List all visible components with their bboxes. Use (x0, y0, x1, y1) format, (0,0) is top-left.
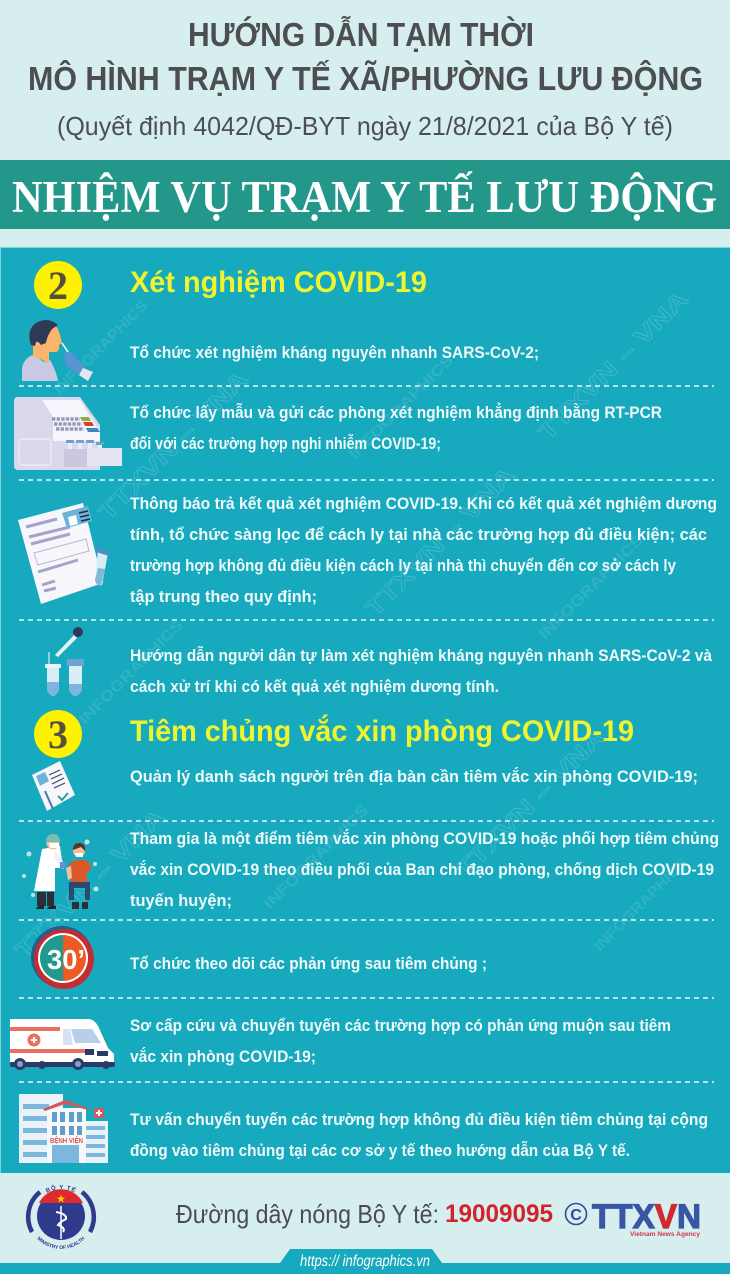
footer bar with website (0, 1249, 730, 1274)
section 2 heading: Xét nghiệm COVID-19 (130, 266, 427, 299)
section 2 number badge (34, 261, 82, 309)
text: rapid antigen testing: Tổ chức xét nghiệm kháng nguyên nhanh SARS-CoV-2; (130, 343, 539, 362)
icon: ambulance (10, 1019, 115, 1070)
icon: nasal swab test (22, 320, 93, 381)
text: self testing: cách xử trí khi có kết quả xét nghiệm dương tính. (130, 677, 499, 696)
text: transfer consultation: đồng vào tiêm chủng tại các cơ sở y tế theo hướng dẫn của Bộ Y tế. (130, 1141, 630, 1160)
icon: 30 minute timer (31, 926, 94, 989)
icon: doctor vaccinating patient (22, 834, 98, 909)
icon: analyzer machine (14, 397, 122, 470)
text: first aid and transfer: Sơ cấp cứu và chuyển tuyến các trường hợp có phản ứng muộn sau tiêm (130, 1016, 671, 1035)
copyright mark: C (570, 1207, 582, 1224)
panel: tasks: TTXVN – VNA (450, 724, 610, 884)
panel: tasks: INFOGRAPHICS (76, 617, 187, 728)
text: vaccination point: tuyến huyện; (130, 891, 232, 910)
section 3 number badge (34, 710, 82, 758)
text: result notification: trường hợp không đủ điều kiện cách ly tại nhà thì chuyển đến cơ sở cách ly (130, 556, 676, 575)
icon: vaccination list (32, 761, 75, 811)
title: HƯỚNG DẪN TẠM THỜI (188, 16, 534, 53)
panel: tasks: INFOGRAPHICS (536, 532, 647, 643)
panel: tasks: TTXVN – VNA (93, 366, 253, 526)
panel: tasks: INFOGRAPHICS (346, 352, 457, 463)
text: first aid and transfer (130, 1016, 671, 1066)
text: transfer consultation (130, 1110, 708, 1160)
text: result notification (130, 494, 717, 606)
panel: tasks: TTXVN – VNA (360, 462, 520, 622)
text: first aid and transfer: vắc xin phòng COVID-19; (130, 1047, 316, 1066)
logo: TTXVN: Vietnam News Agency (630, 1231, 700, 1238)
panel: tasks: TTXVN – VNA (10, 804, 170, 964)
logo: Ministry of Health: MINISTRY OF HEALTH (37, 1236, 84, 1249)
panel: tasks: TTXVN – VNA (533, 286, 693, 446)
text: RT-PCR samples: Tổ chức lấy mẫu và gửi các phòng xét nghiệm khẳng định bằng RT-PCR (130, 403, 662, 422)
section 3 number badge: 3 (48, 712, 68, 757)
text: vaccination list: Quản lý danh sách người trên địa bàn cần tiêm vắc xin phòng COVID-19; (130, 767, 698, 786)
text: post-vaccination monitoring: Tổ chức theo dõi các phản ứng sau tiêm chủng ; (130, 954, 487, 973)
icon: hospital: BỆNH VIỆN (50, 1136, 83, 1145)
text: RT-PCR samples: đối với các trường hợp nghi nhiễm COVID-19; (130, 434, 441, 453)
logo: Ministry of Health: BỘ Y TẾ (46, 1184, 76, 1193)
icon: dropper and tubes (45, 627, 84, 696)
title (28, 16, 703, 97)
panel: tasks: INFOGRAPHICS (261, 802, 372, 913)
icon: result sheet and tube (18, 503, 110, 604)
section 2 number badge: 2 (48, 263, 68, 308)
footer bar with website: https:// infographics.vn (300, 1253, 430, 1270)
text: self testing (130, 646, 712, 696)
hotline: 19009095 (445, 1200, 553, 1228)
subtitle: (Quyết định 4042/QĐ-BYT ngày 21/8/2021 của Bộ Y tế) (57, 111, 673, 141)
logo: Ministry of Health: ★ (56, 1194, 66, 1204)
logo: Ministry of Health (26, 1184, 96, 1249)
icon: hospital (19, 1094, 108, 1163)
text: result notification: tính, tổ chức sàng lọc để cách ly tại nhà các trường hợp đủ điều kiện; các (130, 525, 707, 544)
text: RT-PCR samples (130, 403, 662, 453)
logo: TTXVN: TTXVN (592, 1198, 701, 1236)
panel: tasks: INFOGRAPHICS (51, 297, 151, 398)
copyright mark (566, 1204, 586, 1224)
panel: tasks: INFOGRAPHICS (591, 854, 691, 955)
icon: 30 minute timer: 30’ (47, 944, 85, 975)
text: vaccination point (130, 829, 719, 910)
panel: tasks (0, 247, 730, 1173)
hotline: Đường dây nóng Bộ Y tế: (176, 1199, 439, 1229)
section 3 heading: Tiêm chủng vắc xin phòng COVID-19 (130, 714, 634, 748)
text: result notification: tập trung theo quy định; (130, 587, 317, 606)
